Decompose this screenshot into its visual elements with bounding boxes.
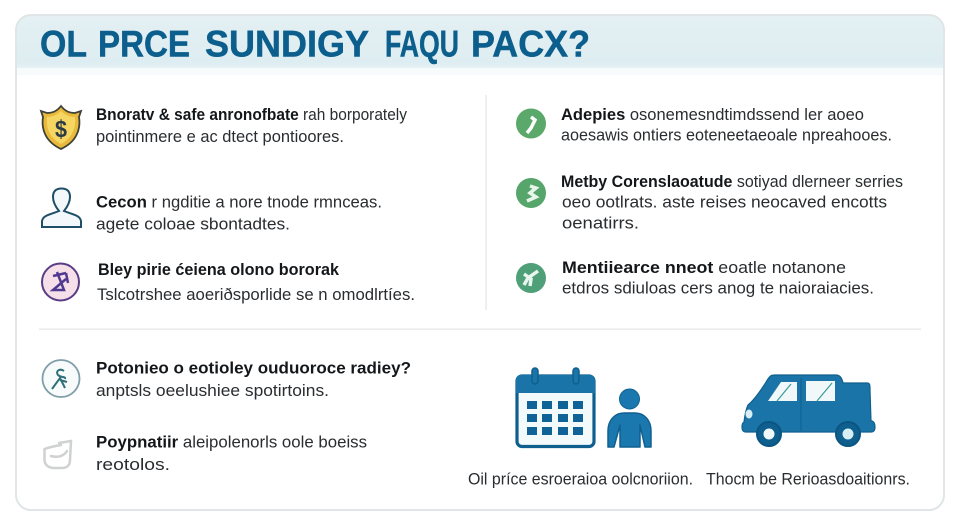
text block: Mentiiearce nneot eoatle notanone [562, 259, 846, 277]
title: FAQU [385, 24, 459, 64]
text block: Cecon r ngditie a nore tnode rmnceas. [96, 194, 382, 212]
icon: shield with dollar [41, 106, 81, 149]
text block [96, 360, 411, 400]
text block [562, 259, 874, 298]
item: left 2 [42, 188, 382, 234]
text block: reotolos. [96, 456, 170, 474]
text block [97, 261, 415, 304]
text block [561, 173, 903, 232]
title: SUNDIGY [205, 24, 369, 64]
icon: shield with dollar: $ [55, 116, 68, 143]
icon: green circle 3 [516, 263, 546, 293]
caption: van: Thocm be Rerioasdoaitionrs. [706, 470, 910, 488]
item: left 3 [42, 261, 415, 304]
text block: anptsls oeelushiee spotirtoins. [96, 382, 329, 400]
icon: green circle 1 [516, 108, 546, 138]
item: right 1 [516, 106, 892, 144]
icon: teal outline circle [42, 360, 80, 397]
item: left 1 [41, 106, 408, 149]
text block: Metby Corenslaoatude sotiyad dlerneer serries [561, 173, 903, 191]
item: right 2 [516, 173, 903, 232]
item: bottom 1 [42, 360, 411, 400]
text block [561, 106, 892, 144]
text block: aoesawis ontiers eoteneetaeoale npreahooes. [561, 126, 892, 144]
icon: gray shape [44, 441, 71, 468]
item: right 3 [516, 259, 874, 298]
text block: Adepies osonemesndtimdssend ler aoeo [561, 106, 864, 124]
icon: green circle 2 [516, 178, 546, 208]
text block: oeo ootlrats. aste reises neocaved encotts [562, 194, 887, 212]
caption: calendar: Oil príce esroeraioa oolcnoriion. [468, 470, 693, 488]
text block [96, 106, 408, 146]
title: PRCE [98, 24, 190, 64]
icon: person [608, 389, 651, 447]
text block: Potonieo o eotioley ouduoroce radiey? [96, 360, 411, 378]
text block: Poypnatiir aleipolenorls oole boeiss [96, 434, 367, 452]
text block: Tslcotrshee aoeriðsporlide se n omodlrtíes. [97, 286, 415, 304]
icon: calendar [516, 368, 595, 446]
text block: pointinmere e ac dtect pontioores. [96, 128, 344, 146]
text block: etdros sdiuloas cers anog te naioraiacies. [562, 280, 874, 298]
text block: agete coloae sbontadtes. [96, 216, 290, 234]
item: bottom 2 [44, 434, 367, 474]
title: OL [40, 24, 87, 64]
text block: oenatirrs. [562, 214, 639, 232]
icon: van [742, 375, 875, 446]
header band [17, 16, 943, 68]
icon: person outline [42, 188, 81, 227]
text block [96, 434, 367, 474]
icon: purple circle [42, 264, 79, 300]
text block: Bnoratv & safe anronofbate rah borporately [96, 106, 408, 124]
text block: Bley pirie ćeiena olono bororak [98, 261, 340, 279]
title [40, 24, 590, 64]
text block [96, 194, 382, 234]
title: PACX? [471, 24, 590, 64]
